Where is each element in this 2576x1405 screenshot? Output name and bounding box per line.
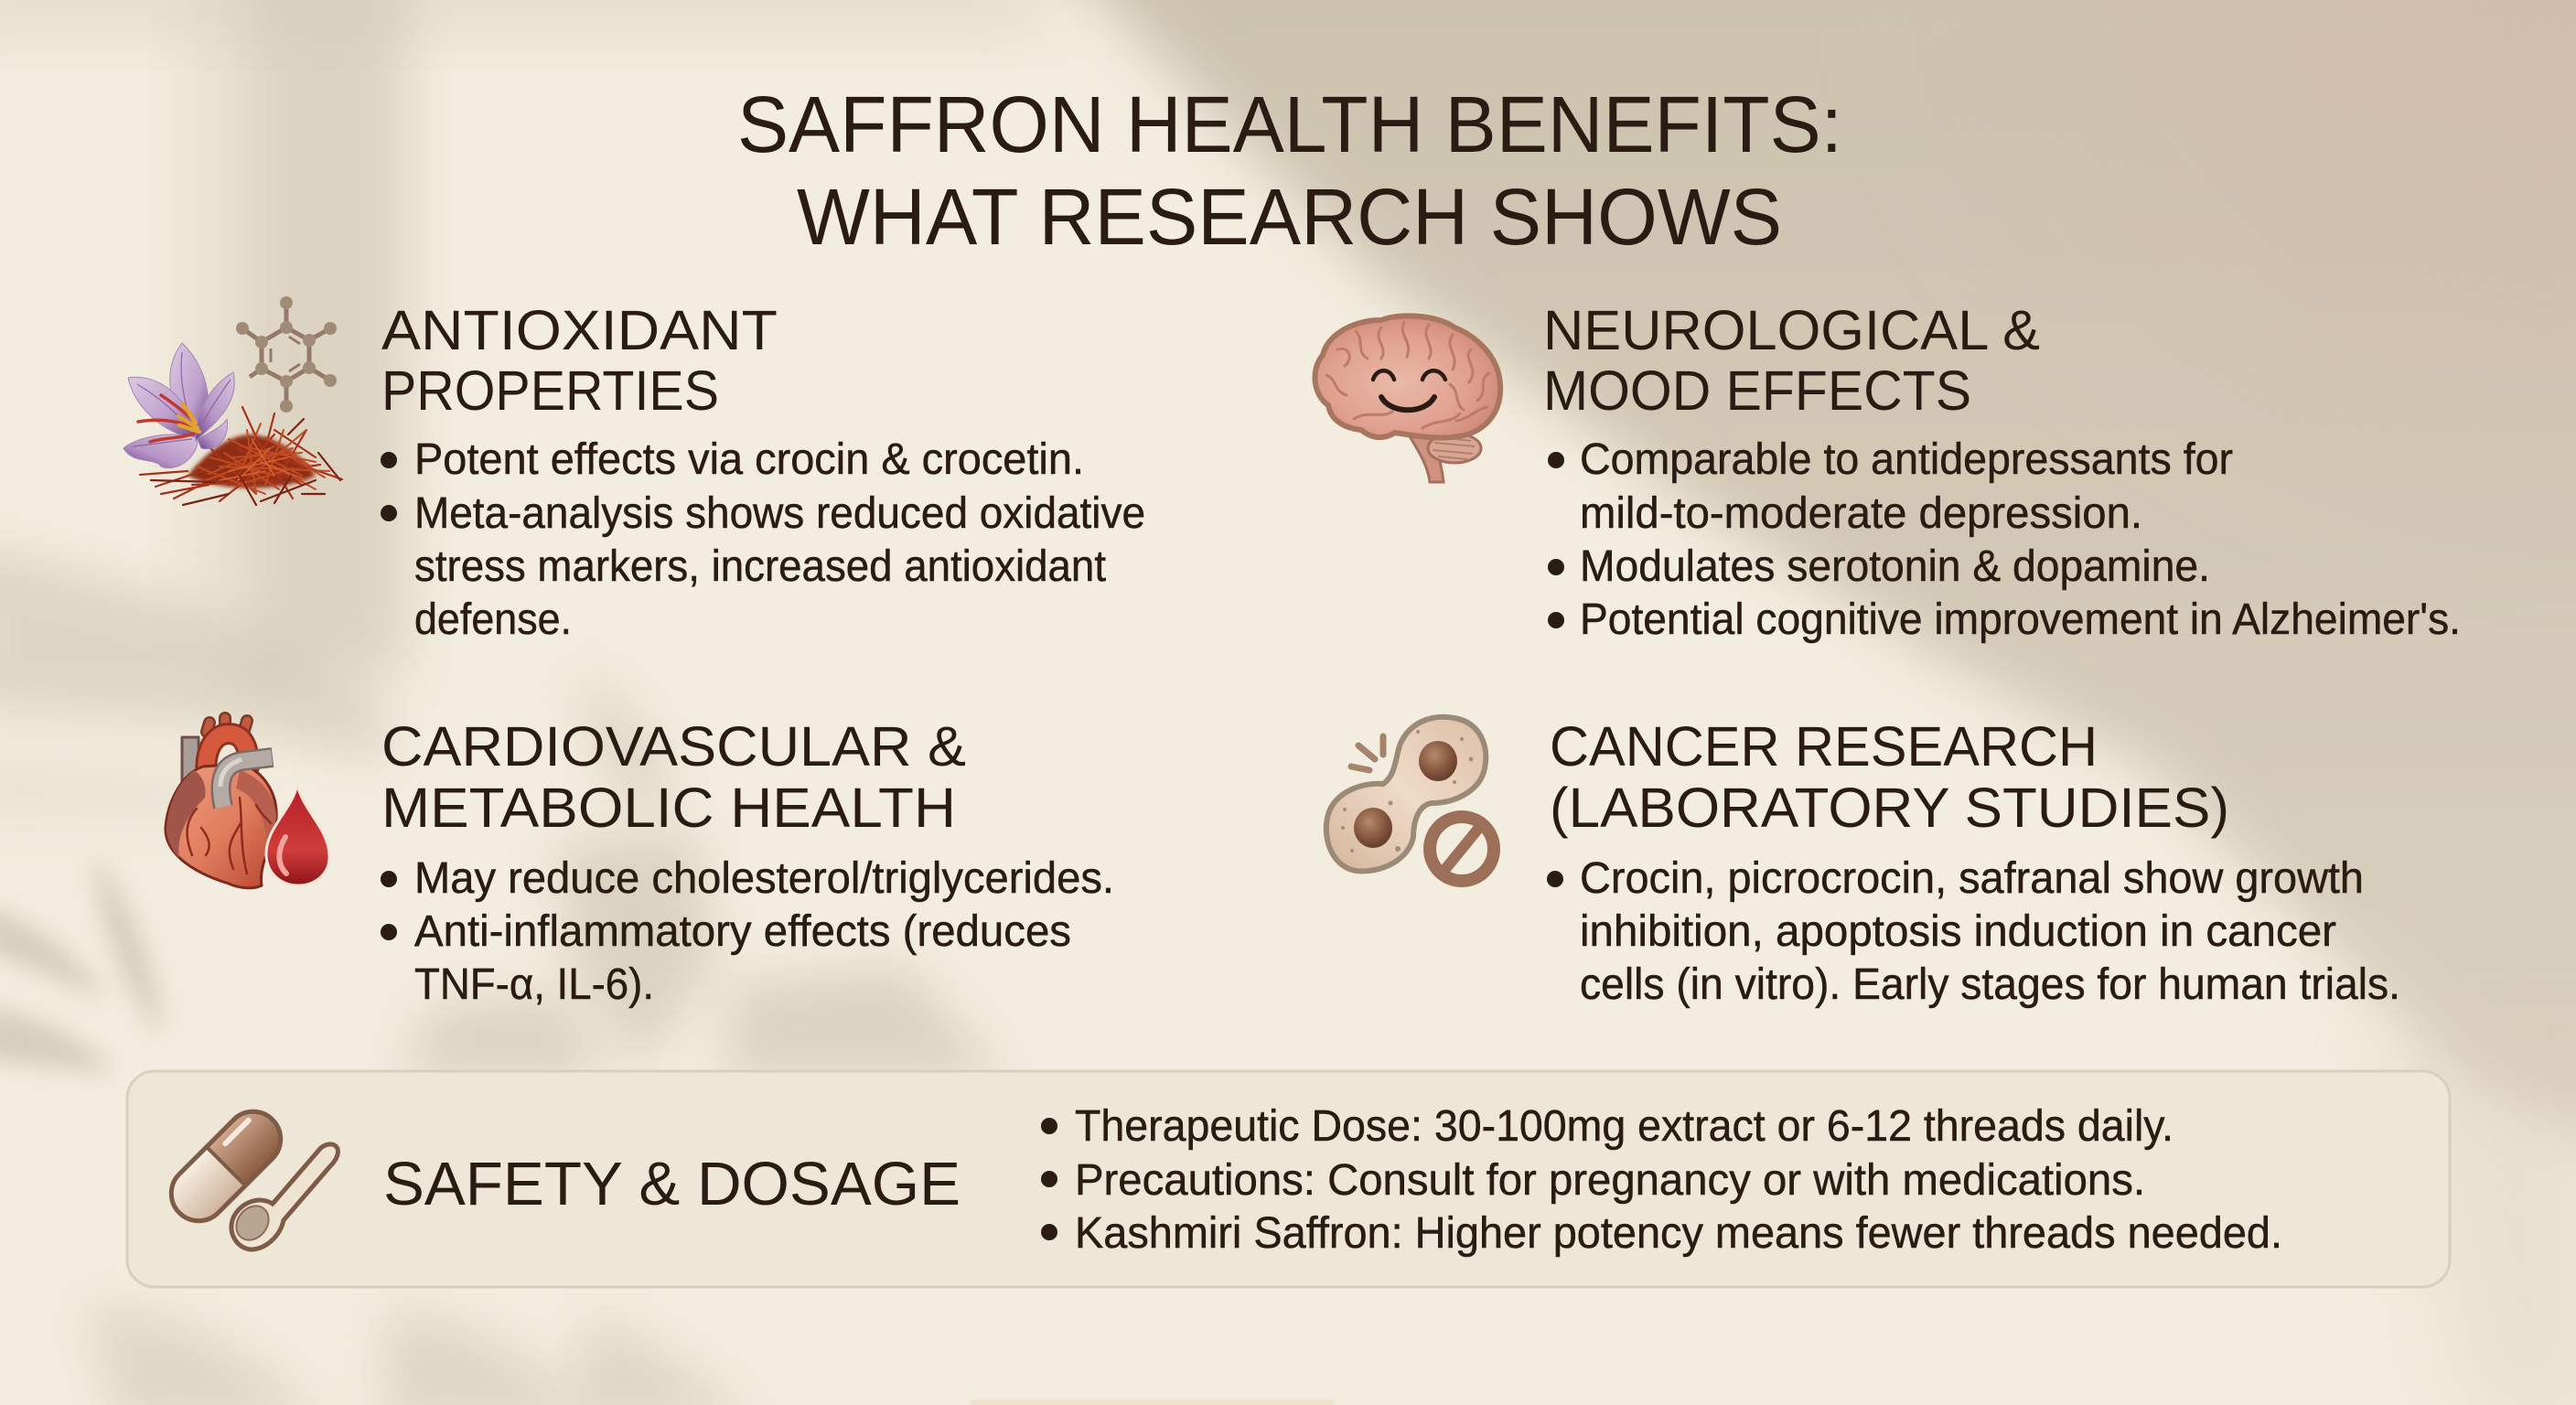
bullet list: [1041, 1102, 2282, 1258]
title: SAFFRON HEALTH BENEFITS:: [737, 80, 1842, 169]
bullet list: TNF-α, IL-6).: [414, 960, 654, 1009]
bullet list: Modulates serotonin & dopamine.: [1580, 542, 2210, 591]
icon: heart and blood drop: [166, 718, 329, 888]
heading: (LABORATORY STUDIES): [1550, 777, 2229, 839]
panel: safety and dosage: [127, 1071, 2450, 1287]
heading: CANCER RESEARCH: [1550, 715, 2098, 778]
bullet list: Meta-analysis shows reduced oxidative: [414, 489, 1145, 538]
bullet list: cells (in vitro). Early stages for human trials.: [1580, 960, 2400, 1009]
icon: saffron flower, threads and molecule: [123, 296, 342, 505]
bullet list: [1548, 435, 2461, 644]
heading: PROPERTIES: [381, 359, 719, 422]
heading: [381, 715, 966, 839]
bullet list: Kashmiri Saffron: Higher potency means fewer threads needed.: [1075, 1209, 2282, 1258]
bullet list: Comparable to antidepressants for: [1580, 435, 2233, 484]
icon: dividing cell with prohibition sign: [1326, 717, 1494, 881]
bullet list: mild-to-moderate depression.: [1580, 489, 2142, 538]
icon: smiling brain: [1315, 316, 1500, 482]
panel: cardiovascular and metabolic health: [166, 715, 1114, 1009]
heading: SAFETY & DOSAGE: [383, 1150, 961, 1218]
icon: capsule and spoon: [160, 1100, 338, 1249]
panel: neurological and mood effects: [1315, 299, 2461, 644]
heading: NEUROLOGICAL &: [1543, 299, 2040, 361]
heading: METABOLIC HEALTH: [381, 777, 956, 839]
bullet list: Anti-inflammatory effects (reduces: [414, 907, 1071, 956]
bullet list: stress markers, increased antioxidant: [414, 542, 1106, 591]
title: WHAT RESEARCH SHOWS: [797, 173, 1782, 262]
bullet list: Potent effects via crocin & crocetin.: [414, 435, 1084, 484]
heading: ANTIOXIDANT: [381, 299, 778, 361]
panel: cancer research: [1326, 715, 2400, 1009]
heading: [381, 299, 778, 422]
bullet list: inhibition, apoptosis induction in cancer: [1580, 907, 2336, 956]
bullet list: Crocin, picrocrocin, safranal show growth: [1580, 854, 2364, 903]
bullet list: defense.: [414, 595, 572, 644]
panel: antioxidant properties: [123, 296, 1145, 644]
bullet list: [1547, 854, 2400, 1009]
bullet list: Therapeutic Dose: 30-100mg extract or 6-12 threads daily.: [1075, 1102, 2174, 1151]
title: [737, 80, 1842, 262]
bullet list: Precautions: Consult for pregnancy or with medications.: [1075, 1156, 2145, 1205]
bullet list: [381, 435, 1145, 644]
bullet list: Potential cognitive improvement in Alzheimer's.: [1580, 595, 2461, 644]
bullet list: [381, 854, 1114, 1009]
bullet list: May reduce cholesterol/triglycerides.: [414, 854, 1114, 903]
heading: CARDIOVASCULAR &: [381, 715, 966, 778]
heading: [1550, 715, 2229, 839]
heading: MOOD EFFECTS: [1543, 359, 1971, 422]
heading: [1543, 299, 2040, 422]
